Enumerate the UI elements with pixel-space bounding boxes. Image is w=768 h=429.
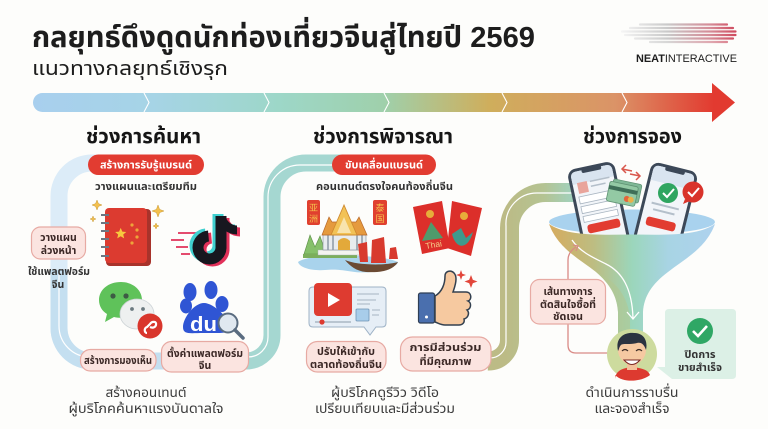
callout: plan ahead: วางแผน: [40, 232, 77, 244]
callout: set up Chinese platforms: ตั้งค่าแพลตฟอร์ม: [167, 346, 243, 360]
icon: green check on phone: [658, 183, 678, 203]
logo: Neat Interactive: NEATINTERACTIVE: [636, 53, 737, 65]
caption: booking stage: และจองสำเร็จ: [594, 401, 670, 416]
flow path: search: [59, 163, 250, 361]
label: use Chinese platforms: ใช้แพลตฟอร์ม: [28, 265, 90, 278]
icon: Baidu search: [180, 281, 243, 338]
callout: set up Chinese platforms: [162, 342, 248, 372]
funnel: [549, 224, 715, 345]
callout: set up Chinese platforms: จีน: [199, 360, 211, 372]
callout: clear purchase decision path: ชัดเจน: [553, 311, 583, 323]
callout: clear purchase decision path: [530, 280, 606, 324]
icon: red envelopes: Thai: [425, 238, 443, 251]
callout: plan ahead: ล่วงหน้า: [41, 244, 76, 257]
caption: search stage: ผู้บริโภคค้นหาแรงบันดาลใจ: [68, 401, 224, 417]
callout: build visibility: สร้างการมองเห็น: [84, 354, 152, 367]
pill: drive the brand: [332, 154, 436, 175]
callout: build visibility: [80, 350, 156, 371]
title: กลยุทธ์ดึงดูดนักท่องเที่ยวจีนสู่ไทยปี 2569: [32, 16, 535, 55]
icon: red confirmation badge: [682, 182, 704, 204]
icon: Thai temple and junk boat: 亚: [309, 203, 318, 213]
subtitle: แนวทางกลยุทธ์เชิงรุก: [32, 58, 228, 80]
icon: video content card: [309, 283, 386, 335]
caption: consideration stage: เปรียบเทียบและมีส่วนร่วม: [315, 400, 455, 416]
caption: search stage: สร้างคอนเทนต์: [106, 385, 186, 400]
callout: plan ahead: [32, 227, 86, 259]
callout: quality engagement: การมีส่วนร่วม: [410, 341, 482, 354]
icon: TikTok: [171, 214, 240, 261]
funnel back rim: [549, 210, 715, 234]
icon: Thai temple and junk boat: 洲: [309, 214, 318, 224]
icon: phone with confirmation: [632, 163, 697, 261]
icon: phone with booking form: [568, 162, 631, 260]
icon: China notebook: [90, 200, 164, 266]
avatar: happy traveller: [607, 329, 657, 381]
label: plan and prepare team: วางแผนและเตรียมทีม: [95, 181, 197, 193]
olive stream into funnel spout: [596, 272, 630, 345]
flow path: booking: [488, 192, 580, 361]
caption: booking stage: ดำเนินการราบรื่น: [586, 383, 678, 400]
callout: quality engagement: [400, 337, 491, 371]
success card: [657, 309, 736, 379]
callout: adapt to local market: [306, 342, 386, 372]
caption: booking stage: [586, 383, 678, 416]
label: content for local Chinese: คอนเทนต์ตรงใจคนท้องถิ่นจีน: [316, 180, 453, 193]
success card: ขายสำเร็จ: [678, 362, 722, 374]
icon: red envelopes: [413, 201, 482, 256]
callout: quality engagement: ที่มีคุณภาพ: [420, 354, 472, 368]
icon: exchange arrows: [622, 165, 640, 180]
heading: consideration stage: ช่วงการพิจารณา: [313, 126, 453, 148]
pill: brand awareness: สร้างการรับรู้แบรนด์: [100, 158, 192, 172]
callout: adapt to local market: ปรับให้เข้ากับ: [317, 345, 375, 358]
icon: thumbs up: [418, 270, 478, 325]
logo: Neat Interactive: [622, 24, 737, 65]
heading: booking stage: ช่วงการจอง: [583, 126, 682, 148]
icon: Thai temple and junk boat: 国: [375, 214, 385, 224]
caption: search stage: [68, 385, 224, 417]
pill: brand awareness: [88, 154, 204, 175]
callout: adapt to local market: ตลาดท้องถิ่นจีน: [310, 358, 382, 371]
flow path: consideration: [246, 163, 345, 361]
caption: consideration stage: [315, 385, 455, 416]
callout: clear purchase decision path: ตัดสินใจซื้อที่: [540, 297, 596, 311]
success card: ปิดการ: [684, 349, 716, 361]
caption: consideration stage: ผู้บริโภคดูรีวิว วิดีโอ: [331, 385, 439, 401]
icon: Thai temple and junk boat: 泰: [375, 202, 385, 213]
connector lines from decision path box: [568, 245, 610, 353]
label: use Chinese platforms: [28, 265, 90, 291]
flow arrow through funnel: [572, 240, 639, 319]
callout: clear purchase decision path: เส้นทางการ: [544, 285, 593, 298]
icon: WeChat mini program: [99, 282, 162, 338]
label: use Chinese platforms: จีน: [52, 279, 64, 291]
icon: Thai temple and junk boat: [298, 200, 398, 272]
timeline arrow: [33, 83, 735, 122]
icon: payment card: [606, 178, 642, 207]
icon: Baidu search: du: [190, 314, 217, 336]
pill: drive the brand: ขับเคลื่อนแบรนด์: [345, 158, 423, 172]
heading: search stage: ช่วงการค้นหา: [86, 126, 201, 148]
